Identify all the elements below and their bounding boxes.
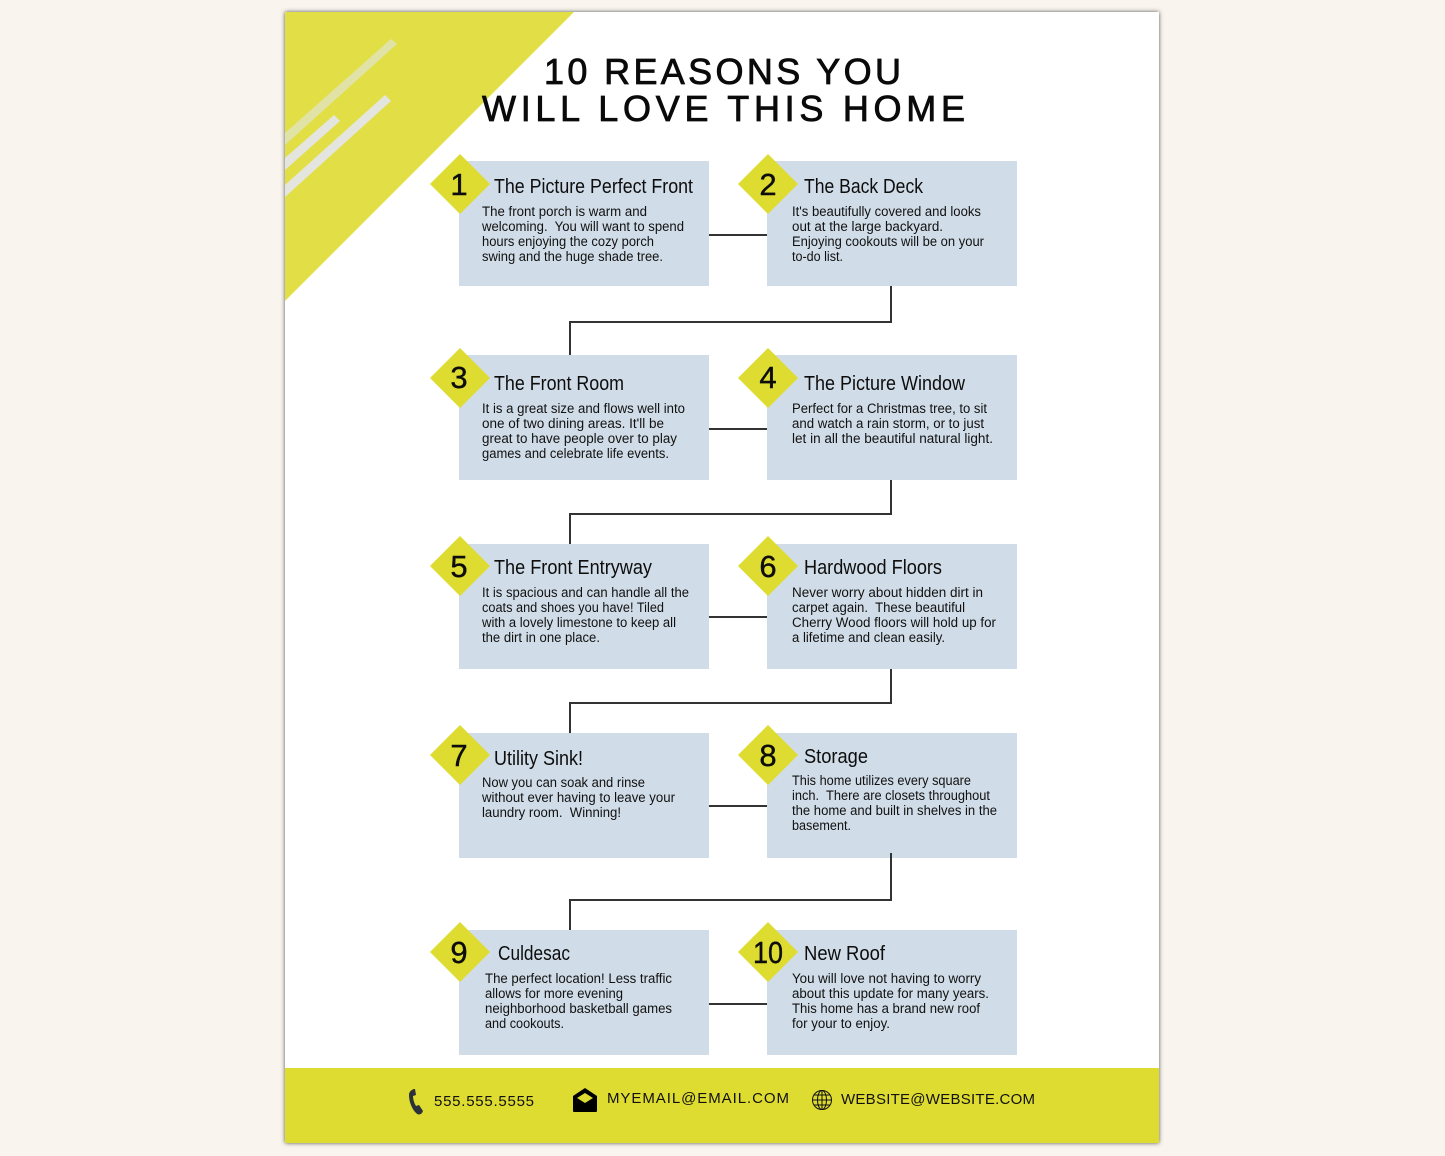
card 1: The Picture Perfect Front: The Picture Perfect Front (494, 176, 693, 198)
card 10: New Roof: This home has a brand new roof (792, 1001, 980, 1016)
card 3: The Front Room (430, 348, 709, 480)
card 5: The Front Entryway: 5 (450, 549, 468, 584)
card 9: Culdesac: and cookouts. (485, 1016, 564, 1031)
card 10: New Roof: about this update for many years. (792, 986, 989, 1001)
title (482, 51, 965, 129)
card 3: The Front Room: 3 (450, 360, 468, 395)
card 1: The Picture Perfect Front: welcoming. You will want to spend (481, 219, 684, 234)
icon: phone (409, 1089, 423, 1114)
card 3: The Front Room: one of two dining areas. It'll be (482, 416, 664, 431)
card 9: Culdesac: The perfect location! Less traffic (485, 971, 672, 986)
icon: envelope (573, 1088, 597, 1112)
card 2: The Back Deck: Enjoying cookouts will be on your (792, 234, 984, 249)
card 4: The Picture Window: and watch a rain storm, or to just (792, 416, 984, 431)
card 9: Culdesac: allows for more evening (485, 986, 623, 1001)
card 6: Hardwood Floors (738, 536, 1017, 669)
email address: MYEMAIL@EMAIL.COM (607, 1090, 789, 1107)
card 6: Hardwood Floors: Never worry about hidden dirt in (792, 585, 983, 600)
card 9: Culdesac: 9 (450, 935, 468, 970)
card 2: The Back Deck: out at the large backyard. (792, 219, 943, 234)
card 6: Hardwood Floors: a lifetime and clean easily. (792, 630, 945, 645)
title: 10 REASONS YOU (544, 51, 901, 92)
card 6: Hardwood Floors: 6 (759, 549, 777, 584)
card 10: New Roof: 10 (753, 935, 783, 970)
card 4: The Picture Window (738, 348, 1017, 480)
card 9: Culdesac: neighborhood basketball games (485, 1001, 672, 1016)
card 2: The Back Deck: to-do list. (792, 249, 843, 264)
card 7: Utility Sink!: Utility Sink! (494, 748, 583, 770)
card 10: New Roof: for your to enjoy. (792, 1016, 890, 1031)
card 4: The Picture Window: 4 (759, 360, 777, 395)
card 10: New Roof: You will love not having to worry (792, 971, 981, 986)
card 8: Storage: This home utilizes every square (792, 773, 971, 788)
card 5: The Front Entryway: The Front Entryway (494, 557, 652, 579)
card 7: Utility Sink!: without ever having to leave your (481, 790, 675, 805)
icon: globe (812, 1090, 832, 1110)
title: WILL LOVE THIS HOME (482, 88, 965, 129)
card 5: The Front Entryway (430, 536, 709, 669)
card 8: Storage: basement. (792, 818, 851, 833)
card 6: Hardwood Floors: Hardwood Floors (804, 557, 942, 579)
card 8: Storage: the home and built in shelves in the (792, 803, 997, 818)
card 5: The Front Entryway: It is spacious and can handle all the (482, 585, 689, 600)
card 8: Storage: 8 (759, 738, 777, 773)
card 8: Storage: Storage (804, 746, 868, 768)
card 9: Culdesac (430, 922, 709, 1055)
card 4: The Picture Window: The Picture Window (804, 373, 965, 395)
card 5: The Front Entryway: with a lovely limestone to keep all (481, 615, 676, 630)
card 7: Utility Sink! (430, 725, 709, 858)
connector lines (570, 235, 891, 1004)
card 7: Utility Sink!: 7 (450, 738, 468, 773)
card 4: The Picture Window: let in all the beautiful natural light. (792, 431, 993, 446)
card 3: The Front Room: It is a great size and flows well into (482, 401, 685, 416)
card 6: Hardwood Floors: carpet again. These beautiful (792, 600, 965, 615)
website address: WEBSITE@WEBSITE.COM (841, 1091, 1035, 1108)
card 7: Utility Sink!: Now you can soak and rinse (482, 775, 645, 790)
card 1: The Picture Perfect Front: swing and the huge shade tree. (482, 249, 663, 264)
card 6: Hardwood Floors: Cherry Wood floors will hold up for (792, 615, 996, 630)
card 2: The Back Deck: 2 (759, 167, 777, 202)
card 3: The Front Room: The Front Room (494, 373, 624, 395)
card 7: Utility Sink!: laundry room. Winning! (482, 805, 621, 820)
card 10: New Roof: New Roof (804, 943, 885, 965)
card 5: The Front Entryway: the dirt in one place. (482, 630, 600, 645)
phone number: 555.555.5555 (434, 1093, 534, 1110)
card 9: Culdesac: Culdesac (498, 943, 570, 965)
corner decoration (285, 12, 574, 301)
footer bar (285, 1068, 1159, 1143)
card 8: Storage: inch. There are closets throughout (792, 788, 990, 803)
card 3: The Front Room: games and celebrate life events. (482, 446, 669, 461)
card 2: The Back Deck: The Back Deck (804, 176, 924, 198)
card 8: Storage (738, 725, 1017, 858)
card 5: The Front Entryway: coats and shoes you have! Tiled (482, 600, 664, 615)
card 1: The Picture Perfect Front (430, 154, 709, 286)
card 10: New Roof (738, 922, 1017, 1055)
card 1: The Picture Perfect Front: The front porch is warm and (482, 204, 647, 219)
page panel (285, 12, 1159, 1143)
card 1: The Picture Perfect Front: hours enjoying the cozy porch (482, 234, 654, 249)
card 2: The Back Deck: It's beautifully covered and looks (792, 204, 981, 219)
card 1: The Picture Perfect Front: 1 (450, 167, 468, 202)
card 2: The Back Deck (738, 154, 1017, 286)
card 4: The Picture Window: Perfect for a Christmas tree, to sit (792, 401, 987, 416)
card 3: The Front Room: great to have people over to play (482, 431, 677, 446)
